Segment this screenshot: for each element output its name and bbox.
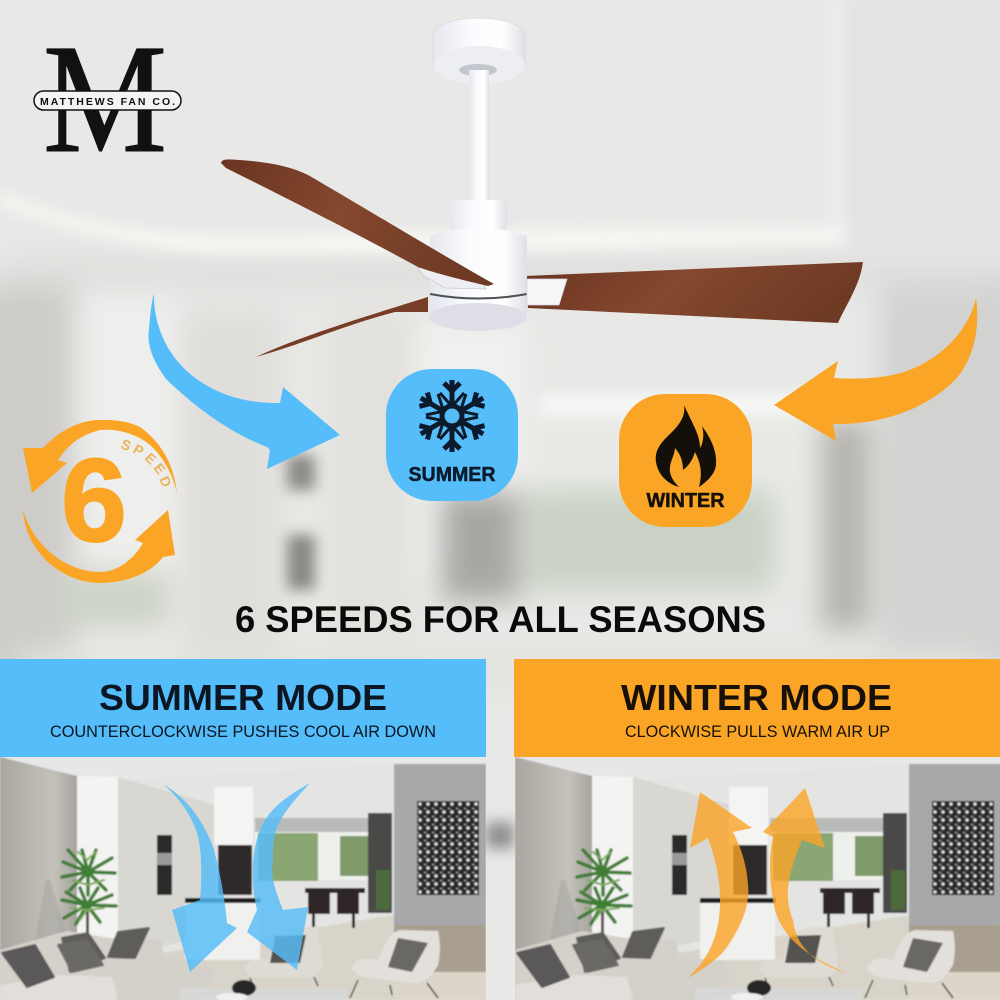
numeral 6: 6 [61, 435, 127, 567]
motor housing [429, 228, 527, 331]
panel title: winter mode: WINTER MODE [621, 677, 892, 718]
icon: snowflake [414, 380, 490, 452]
label: speed: D [156, 474, 175, 489]
label: winter: WINTER [646, 490, 725, 512]
badge: summer [386, 369, 518, 501]
label: speed: E [142, 449, 160, 467]
arrow: summer airflow [148, 293, 340, 469]
heading: 6 SPEEDS FOR ALL SEASONS [235, 599, 766, 640]
label: speed: S [119, 436, 133, 454]
room photo: winter [515, 757, 1000, 1000]
label: speed: E [151, 460, 169, 477]
fan blade: right [525, 262, 863, 323]
bracket left [417, 267, 486, 289]
icon: flame [656, 405, 716, 487]
label: summer: SUMMER [408, 464, 496, 486]
logo: Matthews Fan Co.: M [43, 12, 167, 185]
panel: winter mode [514, 659, 1000, 757]
label: speed: P [130, 441, 147, 459]
logo: Matthews Fan Co.: MATTHEWS FAN CO. [40, 96, 175, 108]
bottom rotation arrow [23, 510, 175, 583]
panel subtitle: summer: COUNTERCLOCKWISE PUSHES COOL AIR DOWN [50, 723, 436, 741]
arrow: winter airflow [774, 298, 977, 441]
fan blade: upper left [221, 159, 494, 286]
badge: winter [619, 394, 752, 527]
canopy and downrod [433, 18, 525, 232]
top rotation arrow [23, 420, 177, 495]
blade bracket [527, 279, 567, 305]
fan blade: lower left [256, 297, 428, 357]
panel subtitle: winter: CLOCKWISE PULLS WARM AIR UP [625, 723, 890, 741]
room photo: summer [0, 757, 486, 1000]
airflow arrows: up [688, 788, 847, 978]
ceiling fan [221, 18, 863, 357]
icon: 6 speed badge [23, 420, 177, 583]
label: speed [119, 436, 175, 489]
airflow arrows: down [163, 783, 310, 972]
panel: summer mode [0, 659, 486, 757]
panel title: summer mode: SUMMER MODE [99, 677, 387, 718]
